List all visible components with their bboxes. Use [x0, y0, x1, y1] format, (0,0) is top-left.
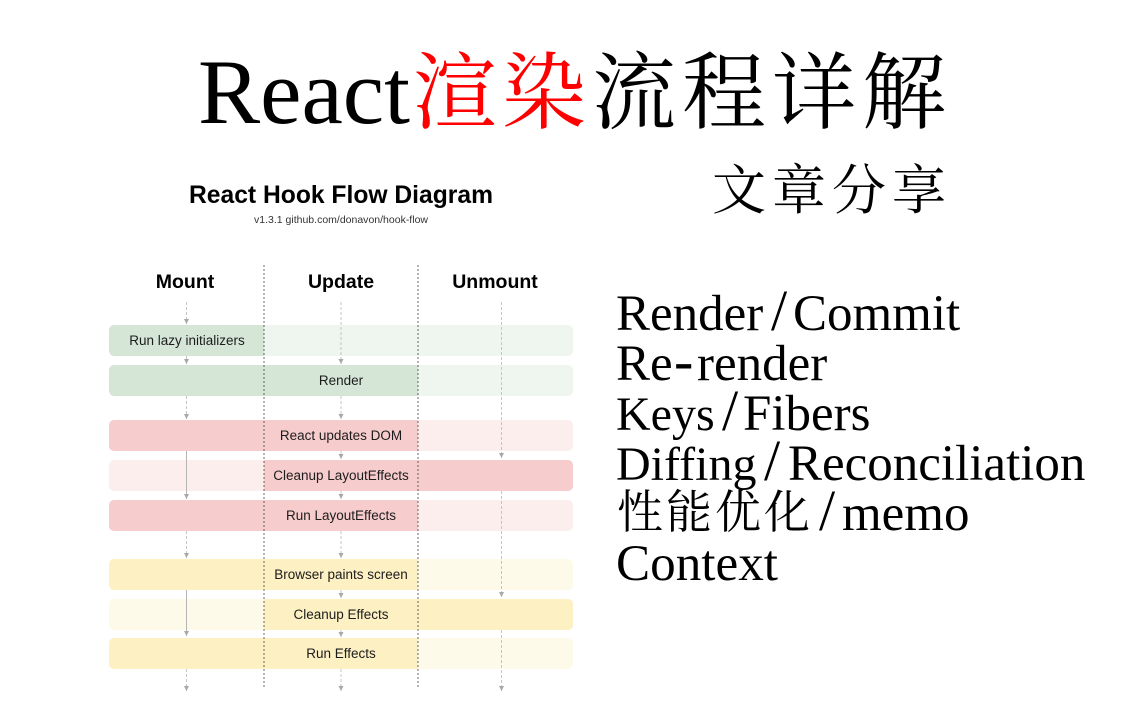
diagram: React Hook Flow — [109, 181, 573, 691]
topic list: Context — [616, 536, 778, 592]
topic list: - — [674, 328, 693, 393]
row: Browser paints screen: Browser paints screen — [274, 567, 408, 582]
row: Run Effects: Run Effects — [306, 646, 376, 661]
topic list: Fibers — [743, 386, 870, 442]
column dividers — [264, 265, 418, 687]
flow arrows — [186, 302, 502, 691]
topic list: Reconciliation — [788, 436, 1085, 492]
topic list: Render — [616, 286, 763, 342]
topic list: / — [819, 478, 836, 543]
topic list: Commit — [793, 286, 960, 342]
column headers: Unmount — [452, 271, 538, 293]
column headers: Mount — [156, 271, 215, 293]
topic list: Diffing — [616, 438, 756, 491]
topic list: Keys — [616, 388, 715, 441]
title — [198, 41, 946, 143]
topic list — [616, 278, 1085, 592]
row: Cleanup Effects: Cleanup Effects — [293, 607, 389, 622]
topic list: render — [697, 336, 827, 392]
row: Render — [109, 365, 573, 396]
diagram heading: React Hook Flow Diagram — [189, 181, 493, 209]
row: Run LayoutEffects — [109, 500, 573, 531]
title: 流程详解 — [592, 48, 946, 141]
row: React updates DOM — [109, 420, 573, 451]
row: Browser paints screen — [109, 559, 573, 590]
row: Cleanup LayoutEffects — [109, 460, 573, 491]
row: Run lazy initializers: Run lazy initializers — [129, 333, 245, 348]
topic list: memo — [842, 486, 969, 542]
row: Cleanup LayoutEffects: Cleanup LayoutEffects — [273, 468, 409, 483]
topic list: / — [722, 378, 739, 443]
row: Run lazy initializers — [109, 325, 573, 356]
diagram version: v1.3.1 github.com/donavon/hook-flow — [254, 214, 428, 226]
title: 渲染 — [413, 48, 586, 141]
row: React updates DOM: React updates DOM — [280, 428, 402, 443]
subtitle: 文章分享 — [712, 161, 946, 221]
topic list: Re — [616, 336, 673, 392]
row: Run LayoutEffects: Run LayoutEffects — [286, 508, 396, 523]
row: Render: Render — [319, 373, 364, 388]
row: Cleanup Effects — [109, 599, 573, 630]
topic list: / — [764, 428, 781, 493]
topic list: 性能优化 — [617, 487, 813, 538]
row: Run Effects — [109, 638, 573, 669]
topic list: / — [771, 278, 788, 343]
column headers: Update — [308, 271, 374, 293]
title: React — [198, 41, 410, 143]
column headers — [156, 271, 538, 293]
